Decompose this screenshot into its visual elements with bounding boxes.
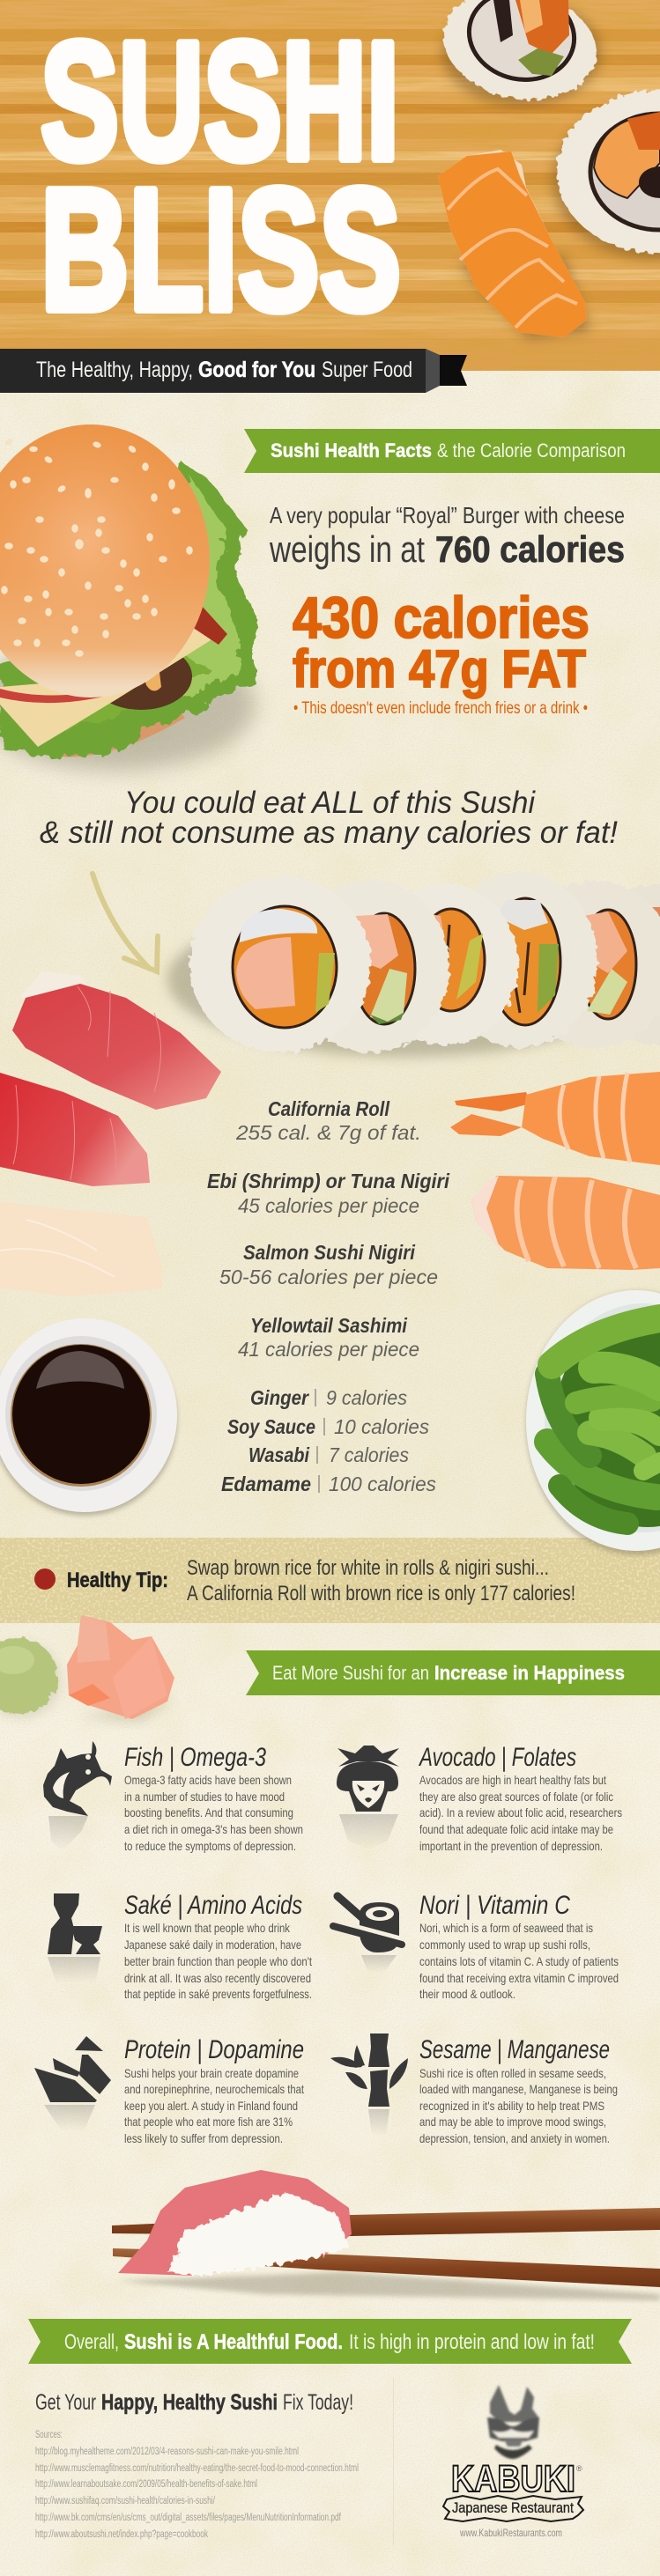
sesame manganese text bbox=[419, 2035, 618, 2145]
sources list: http://www.learnaboutsake.com/2009/05/health-benefits-of-sake.html bbox=[35, 2479, 257, 2490]
kabuki logo: Japanese Restaurant bbox=[452, 2499, 574, 2516]
sake amino acids text: drink at all. It was also recently discovered bbox=[124, 1971, 311, 1985]
edamame pods bbox=[547, 1312, 660, 1527]
healthy tip band: Swap brown rice for white in rolls & nigiri sushi... bbox=[187, 1556, 549, 1580]
roll six bbox=[593, 883, 660, 1045]
title: SUSHI BLISS: SUSHI bbox=[41, 8, 399, 195]
roll one bbox=[189, 876, 371, 1052]
sushi calorie list: Ebi (Shrimp) or Tuna Nigiri bbox=[207, 1170, 450, 1192]
sushi calorie list: Edamame bbox=[221, 1473, 311, 1495]
burger calories text: weighs in at bbox=[269, 528, 425, 570]
green banner: overall: Sushi is A Healthful Food. bbox=[124, 2330, 343, 2354]
nori vitamin c text: their mood & outlook. bbox=[419, 1987, 515, 2001]
shrimp nigiri two bbox=[471, 1176, 660, 1270]
sushi calorie list: 45 calories per piece bbox=[238, 1194, 419, 1217]
sesame manganese text: depression, tension, and anxiety in women. bbox=[419, 2131, 610, 2145]
black ribbon subtitle: Super Food bbox=[322, 358, 412, 382]
avocado folates text bbox=[419, 1743, 622, 1853]
sake amino acids text: that peptide in saké prevents forgetfulness. bbox=[124, 1987, 312, 2001]
call to action heading: Fix Today! bbox=[283, 2390, 353, 2415]
black ribbon subtitle bbox=[0, 349, 467, 393]
sushi calorie list: 7 calories bbox=[329, 1443, 409, 1466]
sushi calorie list bbox=[207, 1097, 450, 1495]
roll five bbox=[515, 881, 660, 1048]
chopsticks bbox=[112, 2208, 660, 2287]
sources list: http://www.musclemagfitness.com/nutrition/healthy-eating/the-secret-food-to-mood-connection.html bbox=[35, 2463, 359, 2474]
protein dopamine text: and norepinephrine, neurochemicals that bbox=[124, 2082, 304, 2096]
sake amino acids text bbox=[124, 1891, 312, 2001]
sesame manganese text: loaded with manganese, Manganese is being bbox=[419, 2082, 618, 2096]
icon: sake bbox=[48, 1893, 102, 1983]
green ribbon: increase in happiness: Eat More Sushi for an bbox=[272, 1662, 429, 1684]
tuna nigiri one bbox=[12, 971, 221, 1110]
sake amino acids text: It is well known that people who drink bbox=[124, 1921, 291, 1935]
handwritten heading: You could eat ALL of this Sushi bbox=[124, 786, 536, 820]
green ribbon: increase in happiness bbox=[246, 1650, 660, 1695]
protein dopamine text bbox=[124, 2035, 304, 2145]
sushi calorie list: 100 calories bbox=[329, 1473, 436, 1495]
fish omega-3 text: boosting benefits. And that consuming bbox=[124, 1805, 293, 1819]
icon: nori roll with chopsticks bbox=[333, 1896, 402, 1973]
sushi calorie list: Yellowtail Sashimi bbox=[250, 1314, 408, 1337]
handwritten heading bbox=[40, 786, 618, 850]
sake amino acids text: Saké | Amino Acids bbox=[124, 1891, 302, 1920]
title: SUSHI BLISS bbox=[41, 8, 401, 346]
restaurant badge bbox=[443, 2496, 583, 2521]
tuna nigiri two bbox=[0, 1073, 150, 1186]
sushi calorie list: 41 calories per piece bbox=[238, 1338, 419, 1361]
sushi calorie list: Ginger bbox=[250, 1386, 309, 1409]
protein dopamine text: Sushi helps your brain create dopamine bbox=[124, 2066, 299, 2080]
kabuki mask bbox=[487, 2385, 539, 2459]
sushi calorie list: Salmon Sushi Nigiri bbox=[243, 1241, 416, 1264]
california rolls bbox=[167, 872, 660, 1057]
salmon nigiri top bbox=[438, 150, 590, 339]
kabuki logo: www.KabukiRestaurants.com bbox=[459, 2527, 562, 2539]
protein dopamine text: Protein | Dopamine bbox=[124, 2035, 304, 2064]
bamboo wood header background bbox=[0, 0, 660, 371]
fish omega-3 text: Fish | Omega-3 bbox=[124, 1743, 266, 1772]
burger calories text bbox=[269, 502, 625, 570]
pickled ginger bbox=[67, 1615, 176, 1722]
call to action heading: Happy, Healthy Sushi bbox=[101, 2390, 278, 2415]
icon: bamboo bbox=[330, 2033, 408, 2136]
fat callout: from 47g FAT bbox=[293, 639, 586, 698]
handwritten heading: & still not consume as many calories or fat! bbox=[40, 816, 618, 850]
wasabi bbox=[0, 1638, 60, 1717]
avocado folates text: found that adequate folic acid intake may be bbox=[419, 1822, 613, 1836]
fish omega-3 text bbox=[124, 1743, 303, 1853]
avocado folates text: they are also great sources of folate (or folic bbox=[419, 1790, 613, 1804]
sesame manganese text: and may be able to improve mood swings, bbox=[419, 2115, 606, 2129]
nori vitamin c text: Nori, which is a form of seaweed that is bbox=[419, 1921, 593, 1935]
avocado folates text: Avocados are high in heart healthy fats but bbox=[419, 1773, 606, 1787]
sushi calorie list: 50-56 calories per piece bbox=[219, 1266, 438, 1288]
icon: origami bbox=[34, 2036, 111, 2131]
sources list: http://www.bk.com/cms/en/us/cms_out/digital_assets/files/pages/MenuNutritionInformation.pdf bbox=[35, 2513, 342, 2523]
sources list: http://www.aboutsushi.net/index.php?page=cookbook bbox=[35, 2529, 208, 2540]
fat callout bbox=[293, 585, 590, 718]
yellowtail sashimi bbox=[0, 1202, 162, 1296]
fat callout: • This doesn't even include french fries or a drink • bbox=[293, 699, 588, 718]
sources list: http://blog.myhealtheme.com/2012/03/4-reasons-sushi-can-make-you-smile.html bbox=[35, 2447, 299, 2457]
nori vitamin c text: commonly used to wrap up sushi rolls, bbox=[419, 1938, 590, 1952]
nigiri bbox=[118, 2170, 352, 2276]
fish omega-3 text: to reduce the symptoms of depression. bbox=[124, 1839, 296, 1853]
sake amino acids text: Japanese saké daily in moderation, have bbox=[124, 1938, 301, 1952]
burger bbox=[0, 424, 256, 771]
protein dopamine text: that people who eat more fish are 31% bbox=[124, 2115, 293, 2129]
black ribbon subtitle: The Healthy, Happy, bbox=[36, 358, 193, 382]
kabuki logo: ® bbox=[576, 2464, 582, 2473]
nori vitamin c text: contains lots of vitamin C. A study of patients bbox=[419, 1954, 619, 1968]
sources list: Sources: bbox=[35, 2430, 63, 2440]
sources list bbox=[35, 2430, 359, 2540]
green ribbon: sushi health facts bbox=[244, 429, 660, 473]
green ribbon: increase in happiness: Increase in Happiness bbox=[434, 1662, 625, 1684]
avocado folates text: important in the prevention of depression. bbox=[419, 1839, 603, 1853]
healthy tip band bbox=[0, 1538, 660, 1623]
icon: fish bbox=[43, 1741, 112, 1851]
burger calories text: 760 calories bbox=[435, 528, 625, 570]
green banner: overall: It is high in protein and low in fat! bbox=[349, 2330, 595, 2354]
sushi calorie list: Wasabi bbox=[248, 1443, 310, 1466]
sushi calorie list: 255 cal. & 7g of fat. bbox=[235, 1121, 421, 1144]
arrow bbox=[93, 874, 158, 971]
sushi roll top bbox=[433, 0, 607, 114]
nori vitamin c text: Nori | Vitamin C bbox=[419, 1891, 570, 1920]
shrimp nigiri one bbox=[450, 1072, 660, 1165]
fat callout: 430 calories bbox=[293, 585, 590, 650]
green banner: overall: Overall, bbox=[64, 2330, 119, 2354]
sesame seeds bbox=[2, 439, 192, 656]
black ribbon subtitle: Good for You bbox=[198, 358, 315, 382]
title: SUSHI BLISS: BLISS bbox=[41, 153, 401, 346]
protein dopamine text: less likely to suffer from depression. bbox=[124, 2131, 283, 2145]
fish omega-3 text: Omega-3 fatty acids have been shown bbox=[124, 1773, 292, 1787]
roll two bbox=[291, 880, 449, 1052]
protein dopamine text: keep you alert. A study in Finland found bbox=[124, 2099, 298, 2113]
avocado folates text: Avocado | Folates bbox=[419, 1743, 576, 1772]
kabuki wordmark: KABUKI bbox=[451, 2458, 575, 2500]
sake amino acids text: better brain function than people who don't bbox=[124, 1954, 312, 1968]
edamame bowl bbox=[526, 1290, 660, 1555]
nori vitamin c text bbox=[419, 1891, 619, 2001]
sesame manganese text: recognized in it's ability to help treat PMS bbox=[419, 2099, 604, 2113]
sushi calorie list: California Roll bbox=[268, 1097, 390, 1120]
roll three bbox=[372, 883, 518, 1045]
green ribbon: sushi health facts: & the Calorie Comparison bbox=[437, 439, 626, 461]
sushi roll right bbox=[552, 91, 660, 260]
sushi calorie list: 10 calories bbox=[334, 1415, 429, 1438]
fish omega-3 text: a diet rich in omega-3's has been shown bbox=[124, 1822, 303, 1836]
sesame manganese text: Sushi rice is often rolled in sesame seeds, bbox=[419, 2066, 606, 2080]
sushi calorie list: 9 calories bbox=[326, 1386, 407, 1409]
icon: geisha bbox=[337, 1746, 399, 1849]
nori vitamin c text: found that receiving extra vitamin C improved bbox=[419, 1971, 619, 1985]
call to action heading: Get Your bbox=[35, 2390, 96, 2415]
green banner: overall bbox=[28, 2319, 632, 2364]
roll four bbox=[442, 872, 597, 1048]
sources list: http://www.sushifaq.com/sushi-health/calories-in-sushi/ bbox=[35, 2496, 216, 2506]
fish omega-3 text: in a number of studies to have mood bbox=[124, 1790, 285, 1804]
chopsticks holding tuna nigiri bbox=[112, 2170, 660, 2300]
kabuki logo bbox=[443, 2385, 583, 2539]
green ribbon: sushi health facts: Sushi Health Facts bbox=[271, 439, 432, 461]
healthy tip band: Healthy Tip: bbox=[67, 1568, 168, 1592]
soy sauce dish bbox=[0, 1318, 177, 1516]
sushi calorie list: Soy Sauce bbox=[227, 1415, 315, 1438]
